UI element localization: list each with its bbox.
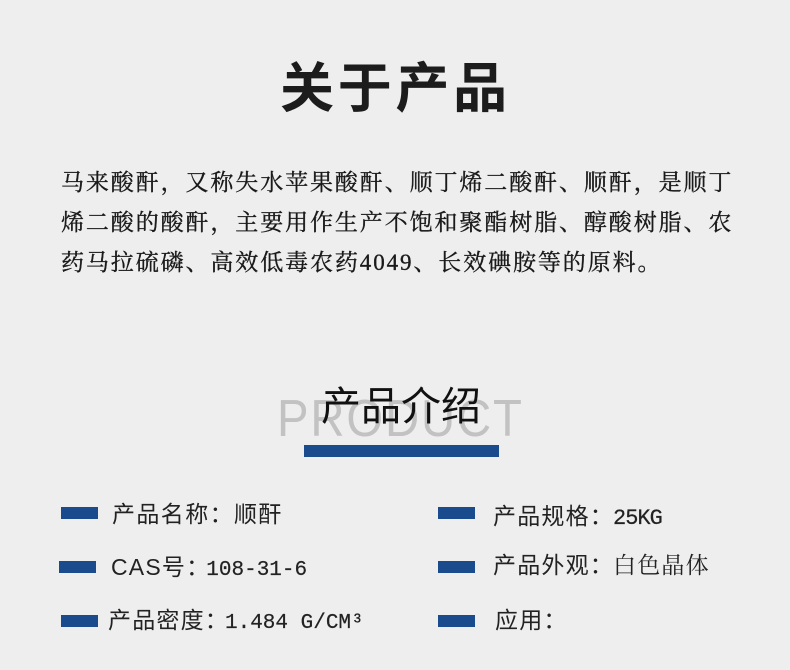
- spec row: specification: 产品规格：25KG: [493, 503, 662, 531]
- heading underline bar: [304, 445, 499, 457]
- section heading: product introduction: [277, 385, 524, 448]
- text block: product description: 烯二酸的酸酐，主要用作生产不饱和聚酯树脂、醇酸树脂、农: [61, 210, 733, 235]
- title: 关于产品: [280, 59, 511, 119]
- text block: product description: [61, 170, 733, 275]
- spec row: CAS number: CAS号：108-31-6: [111, 554, 307, 582]
- text block: product description: 药马拉硫磷、高效低毒农药4049、长效碘胺等的原料。: [61, 250, 662, 275]
- watermark word PRODUCT: PRODUCT: [277, 390, 524, 448]
- spec row: density: 产品密度：1.484 G/CM³: [108, 607, 364, 635]
- text block: product description: 马来酸酐，又称失水苹果酸酐、顺丁烯二酸酐、顺酐，是顺丁: [61, 170, 733, 195]
- spec row: application: 应用：: [495, 607, 568, 633]
- spec row: application: [438, 607, 568, 633]
- spec row: product name: 产品名称：顺酐: [112, 501, 283, 527]
- heading text: 产品介绍: [321, 385, 481, 429]
- spec row: appearance: 产品外观：白色晶体: [493, 552, 710, 578]
